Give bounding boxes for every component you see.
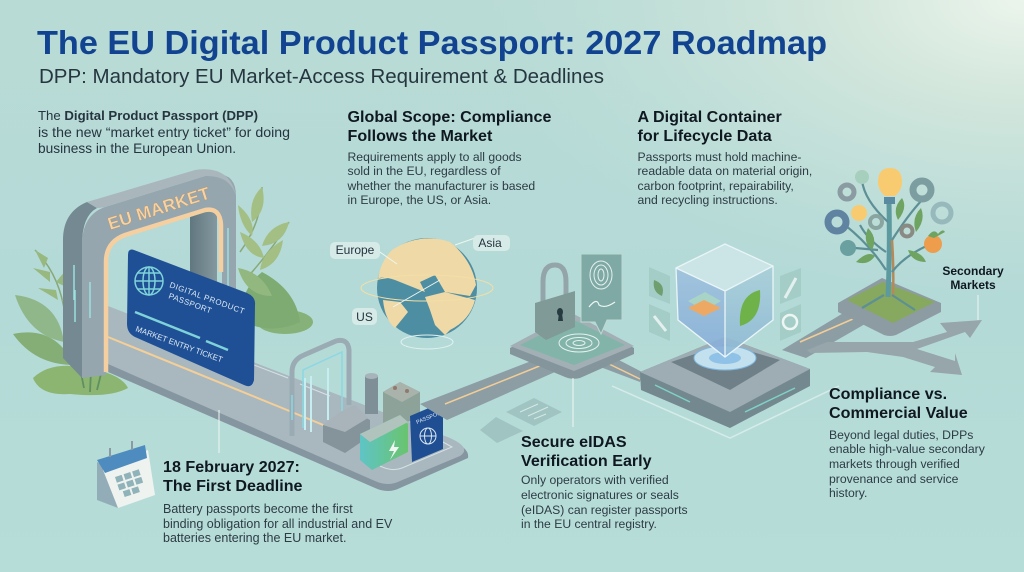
text block: digital container: for Lifecycle Data [638, 127, 773, 145]
label: Asia: Asia [478, 236, 502, 250]
EU market gate [63, 169, 236, 378]
plant: left foliage [13, 250, 128, 395]
icon: padlock [535, 265, 575, 340]
text block: first deadline: Battery passports become the first [163, 502, 353, 516]
passport booklet: PASSPORT [416, 409, 446, 426]
text block: DPP intro [38, 108, 290, 156]
text block: first deadline: binding obligation for all industrial and EV [163, 517, 393, 531]
icon: fingerprint card [581, 254, 622, 334]
icon: globe with regions [361, 238, 493, 349]
text block: DPP intro: The Digital Product Passport (DPP) [38, 108, 258, 123]
text block: first deadline: The First Deadline [163, 477, 303, 495]
text block: digital container: A Digital Container [638, 108, 782, 126]
icon: globe [135, 267, 163, 295]
text block: global scope: Global Scope: Compliance [348, 108, 551, 126]
text block: compliance [829, 385, 986, 500]
icon: data cube [676, 244, 773, 357]
subtitle: DPP: Mandatory EU Market-Access Requirement & Deadlines [39, 66, 604, 88]
text block: compliance: markets through verified [829, 457, 960, 471]
text block: compliance: Beyond legal duties, DPPs [829, 428, 973, 442]
passport card: PASSPORT [167, 291, 213, 315]
passport booklet [410, 402, 446, 462]
label: Europe [330, 242, 380, 259]
text block: compliance: Compliance vs. [829, 385, 947, 403]
plant: right foliage [238, 187, 313, 334]
text block: eIDAS [521, 433, 688, 531]
icons: lifecycle tiles [649, 267, 801, 341]
EU market gate back post [190, 208, 217, 285]
checkpoint gate [292, 340, 349, 436]
fork arrows [807, 320, 982, 375]
text block: eIDAS: electronic signatures or seals [521, 488, 679, 502]
label: secondary markets: Markets [950, 278, 996, 292]
text block: global scope: in Europe, the US, or Asia. [348, 193, 491, 207]
text block: eIDAS: Only operators with verified [521, 473, 669, 487]
platform: eIDAS lock [510, 254, 634, 379]
text block: compliance: history. [829, 486, 867, 500]
text block: global scope: sold in the EU, regardless of [348, 164, 501, 178]
text block: first deadline: batteries entering the EU market. [163, 531, 346, 545]
text block: global scope: whether the manufacturer is based [346, 179, 535, 193]
passport card: MARKET ENTRY TICKET [134, 324, 224, 364]
text block: compliance: Commercial Value [829, 404, 968, 422]
gate label: EU MARKET [105, 183, 213, 234]
road: middle sections [420, 312, 872, 420]
label: US [352, 308, 377, 325]
text block: DPP intro: business in the European Union. [38, 140, 236, 156]
leader lines [219, 295, 978, 453]
label: Asia [473, 235, 510, 251]
text block: eIDAS: Verification Early [521, 452, 652, 470]
text block: digital container [638, 108, 812, 207]
platform: tree base [838, 278, 941, 336]
small data tiles [480, 398, 562, 443]
title: The EU Digital Product Passport: 2027 Roadmap [37, 24, 827, 61]
label: secondary markets: Secondary [942, 264, 1004, 278]
text block: compliance: enable high-value secondary [829, 442, 986, 456]
label: US: US [356, 310, 373, 324]
text block: digital container: carbon footprint, repairability, [638, 179, 794, 193]
text block: compliance: provenance and service [829, 472, 959, 486]
text block: eIDAS: in the EU central registry. [521, 517, 657, 531]
text block: DPP intro: is the new “market entry ticket” for doing [38, 124, 290, 140]
label: Europe: Europe [336, 243, 375, 257]
platform: container base [612, 337, 839, 438]
text block: global scope: Follows the Market [348, 127, 493, 145]
text block: digital container: Passports must hold machine- [638, 150, 801, 164]
passport card [127, 250, 255, 386]
text block: global scope [346, 108, 551, 207]
text block: digital container: and recycling instructions. [638, 193, 778, 207]
text block: first deadline [163, 458, 393, 545]
text block: eIDAS: Secure eIDAS [521, 433, 627, 451]
icon: calendar [97, 441, 155, 508]
text block: first deadline: 18 February 2027: [163, 458, 300, 476]
passport card: DIGITAL PRODUCT [168, 280, 246, 316]
text block: digital container: readable data on material origin, [638, 164, 812, 178]
road: main passage [108, 306, 468, 491]
text block: global scope: Requirements apply to all goods [348, 150, 522, 164]
icon: tree of ideas [828, 168, 951, 310]
label: secondary markets [942, 264, 1004, 292]
text block: eIDAS: (eIDAS) can register passports [521, 503, 688, 517]
factory and battery [323, 373, 420, 470]
